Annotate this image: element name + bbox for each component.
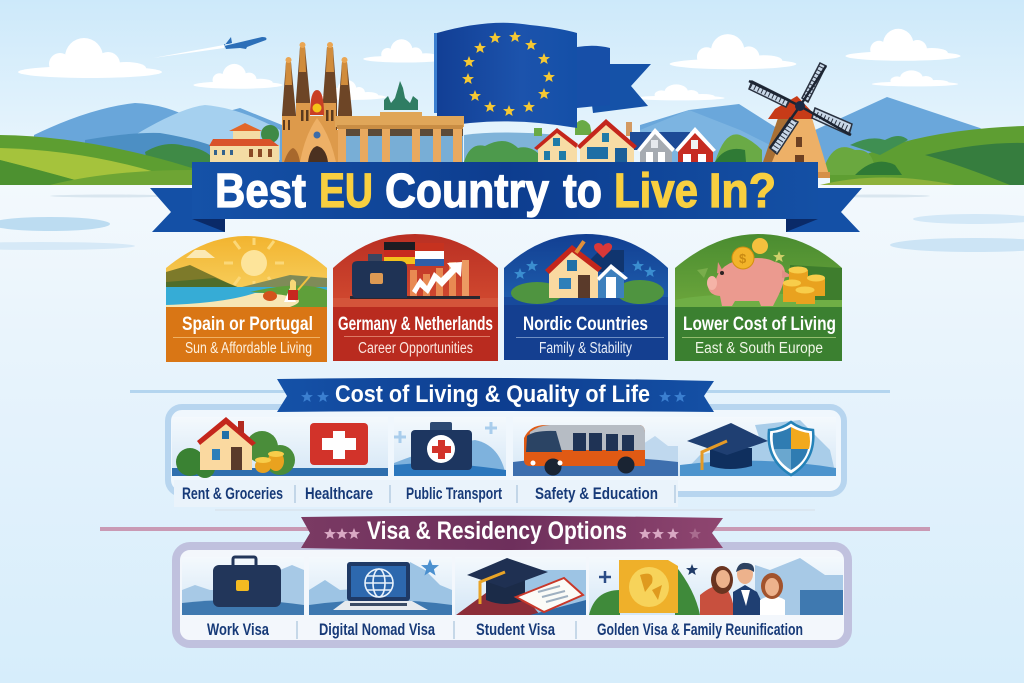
card: rent and healthcare image — [172, 417, 388, 478]
banner: section heading — [301, 516, 723, 550]
card: education and safety image — [678, 417, 836, 476]
banner: section heading — [277, 378, 714, 412]
labels row: Golden Visa & Family Reunification — [597, 621, 803, 639]
panel: Spain or Portugal: Sun & Affordable Living — [185, 340, 312, 357]
icon: Brandenburg Gate — [335, 81, 464, 162]
title text: Country — [385, 165, 549, 218]
card: digital nomad image — [309, 557, 452, 615]
banner: section heading: Visa & Residency Options — [367, 517, 627, 545]
EU flag stars — [462, 31, 555, 116]
card: golden visa and family image — [589, 557, 843, 615]
landscape: mountains and hills — [0, 97, 1024, 185]
panel: Germany & Netherlands — [333, 234, 498, 361]
icon: airplane with contrail — [153, 37, 266, 58]
labels row: Student Visa — [476, 621, 556, 639]
panel: Lower Cost of Living: East & South Europe — [695, 340, 823, 357]
card: student visa image — [455, 557, 586, 615]
panel: Lower Cost of Living: $ — [739, 251, 747, 266]
labels row: Work Visa — [207, 621, 270, 639]
title text — [215, 165, 776, 218]
panel: Nordic Countries — [504, 234, 668, 360]
title text: EU — [319, 165, 373, 218]
labels row: Public Transport — [406, 484, 502, 503]
panel: Visa & Residency Options — [100, 516, 930, 644]
panel: Germany & Netherlands: Germany & Netherlands — [338, 314, 493, 335]
EU flag banner — [434, 23, 651, 130]
icon: Sagrada Familia — [282, 42, 352, 162]
title text: Live — [614, 165, 698, 218]
panel: Cost of Living & Quality of Life — [130, 378, 890, 511]
labels row — [207, 621, 803, 639]
panel: Lower Cost of Living: Lower Cost of Living — [683, 314, 836, 335]
title text: Best — [215, 165, 306, 218]
labels row: Digital Nomad Visa — [319, 621, 436, 639]
panel: Spain or Portugal: Spain or Portugal — [182, 314, 313, 335]
icon: Spanish villa — [209, 123, 279, 162]
clouds — [18, 29, 961, 100]
card: first aid kit image — [394, 417, 506, 476]
title text: In? — [709, 165, 776, 218]
banner: section heading: Cost of Living & Quality of Life — [335, 381, 650, 408]
labels row — [182, 484, 675, 503]
title banner — [150, 162, 862, 232]
panel: Lower Cost of Living — [675, 234, 842, 361]
panel: Germany & Netherlands: Career Opportunities — [358, 340, 473, 357]
panel: Nordic Countries: Family & Stability — [539, 340, 632, 357]
card: work visa image — [182, 557, 304, 615]
labels row: Healthcare — [305, 484, 373, 503]
labels row: Rent & Groceries — [182, 484, 283, 503]
icon: windmill — [749, 63, 852, 178]
panel: Spain or Portugal — [166, 234, 327, 362]
labels row: Safety & Education — [535, 484, 658, 503]
icon: row of houses — [534, 119, 716, 162]
people — [700, 563, 785, 615]
title text: to — [563, 165, 602, 218]
panel: Nordic Countries: Nordic Countries — [523, 314, 648, 335]
card: bus image — [513, 417, 678, 476]
